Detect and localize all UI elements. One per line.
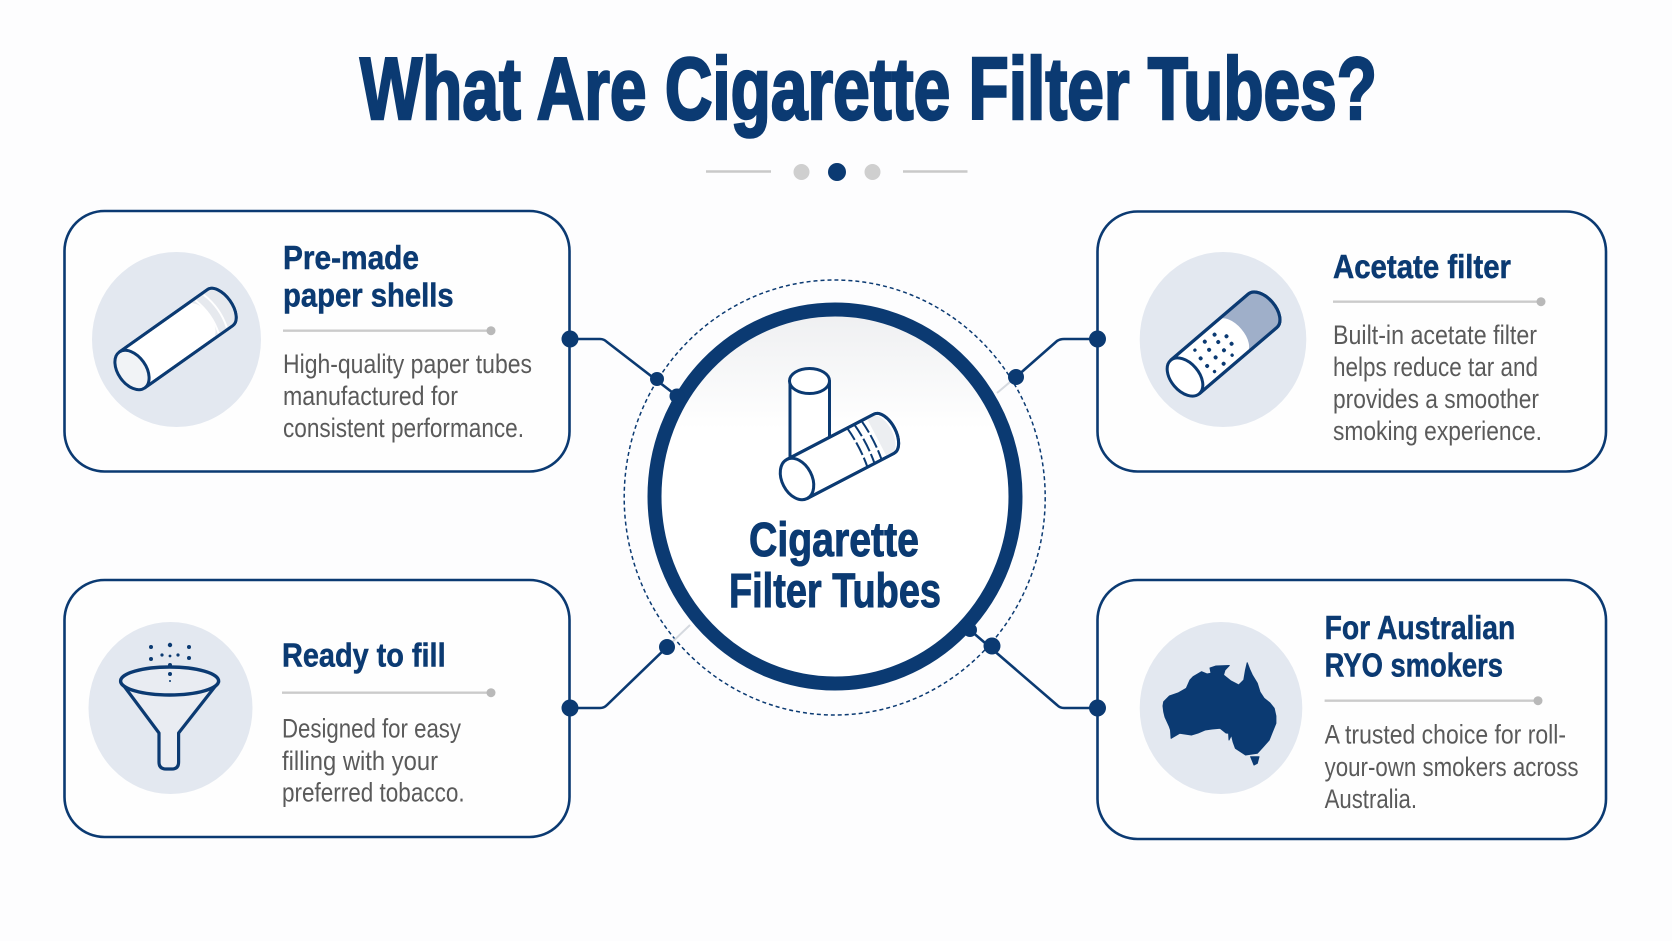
hub label <box>729 514 941 618</box>
heading rule <box>1333 297 1546 306</box>
heading: Ready to fill <box>282 637 446 674</box>
body text: preferred tobacco. <box>282 778 465 808</box>
heading rule <box>1325 696 1542 705</box>
body text <box>282 714 465 808</box>
icon: map of Australia <box>1140 622 1302 794</box>
connector: top-right card to hub <box>997 330 1106 393</box>
body text: Designed for easy <box>282 714 461 744</box>
panel: pre-made paper shells <box>64 211 570 472</box>
connector: top-left card to hub <box>562 330 684 404</box>
heading rule <box>283 326 496 335</box>
title divider <box>706 163 968 181</box>
body text: consistent performance. <box>283 413 524 443</box>
hub label: Cigarette <box>749 514 919 567</box>
body text: A trusted choice for roll- <box>1325 719 1566 749</box>
panel: acetate filter <box>1098 212 1606 472</box>
heading: Acetate filter <box>1333 248 1511 285</box>
heading: For Australian <box>1325 609 1515 646</box>
connector: bottom-left card to hub <box>562 625 690 716</box>
body text: provides a smoother <box>1333 384 1539 414</box>
body text: helps reduce tar and <box>1333 352 1538 382</box>
icon: tube with acetate filter <box>1140 252 1306 427</box>
body text: Australia. <box>1325 784 1417 814</box>
icon: funnel with tobacco <box>88 622 252 794</box>
body text: High-quality paper tubes <box>283 349 532 379</box>
solid hub ring <box>654 310 1016 684</box>
dashed outer ring <box>624 280 1045 715</box>
panel: ready to fill <box>64 580 570 837</box>
hub label: Filter Tubes <box>729 565 941 618</box>
icon: paper tube <box>92 252 261 427</box>
heading: RYO smokers <box>1325 647 1503 684</box>
heading rule <box>282 688 496 697</box>
body text <box>1333 320 1542 446</box>
heading: paper shells <box>283 277 454 314</box>
body text <box>283 349 532 443</box>
panel: for Australian RYO smokers <box>1098 580 1606 839</box>
heading: Pre-made <box>283 239 419 276</box>
body text: manufactured for <box>283 381 458 411</box>
heading <box>1325 609 1515 684</box>
body text: Built-in acetate filter <box>1333 320 1537 350</box>
body text: smoking experience. <box>1333 416 1542 446</box>
panel: central hub <box>624 280 1045 715</box>
body text <box>1325 719 1578 814</box>
icon: two filter tubes <box>774 368 905 505</box>
body text: your-own smokers across <box>1325 752 1578 782</box>
connector: bottom-right card to hub <box>963 623 1106 716</box>
body text: filling with your <box>282 746 438 776</box>
heading <box>283 239 454 314</box>
